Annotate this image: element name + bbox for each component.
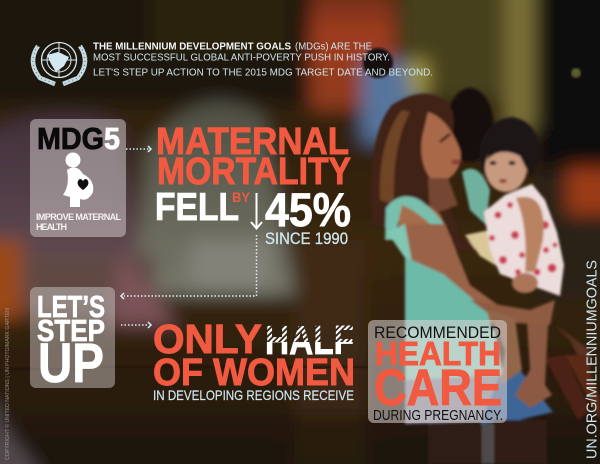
panel: recommended health care: CARE	[374, 359, 502, 416]
photo credit: COPYRIGHT © UNITED NATIONS | UN PHOTO/MARK GARTEN	[4, 308, 11, 460]
arrow: MDG5 to headline	[126, 146, 151, 152]
icon: down arrow	[251, 193, 262, 228]
caption: improve maternal health	[36, 212, 122, 232]
headline: only half of women	[154, 324, 354, 400]
headline: only half of women: IN DEVELOPING REGIONS RECEIVE	[153, 387, 354, 403]
MDG5 label: MDG5	[37, 121, 120, 156]
header	[33, 40, 433, 84]
headline: maternal mortality fell by 45%: 45%	[265, 183, 351, 236]
panel: recommended health care	[368, 320, 507, 424]
caption: improve maternal health: HEALTH	[36, 222, 67, 232]
half with hatched top: HALF	[265, 317, 354, 363]
panel: MDG5	[30, 119, 126, 237]
headline: only half of women: OF WOMEN	[153, 352, 355, 394]
icon: pregnant woman with heart	[63, 152, 93, 207]
panel: recommended health care: HEALTH	[375, 335, 501, 372]
arrow: step up to only half	[121, 322, 151, 328]
panel: let's step up: LET’S	[37, 289, 105, 324]
panel: let's step up: STEP	[37, 313, 105, 348]
panel: recommended health care: RECOMMENDED	[374, 323, 501, 342]
half with hatched top: HALF	[265, 317, 354, 363]
panel: let's step up: UP	[38, 331, 104, 394]
headline: maternal mortality fell by 45%: SINCE 1990	[265, 230, 348, 248]
headline: maternal mortality fell by 45%: MATERNAL	[156, 121, 349, 163]
panel: recommended health care: DURING PREGNANCY.	[373, 408, 503, 424]
url: un.org/millenniumgoals: UN.ORG/MILLENNIUMGOALS	[584, 260, 600, 459]
header text block: MOST SUCCESSFUL GLOBAL ANTI-POVERTY PUSH IN HISTORY.	[93, 52, 390, 64]
headline: maternal mortality fell by 45%	[155, 121, 351, 248]
headline: maternal mortality fell by 45%: FELL	[155, 186, 239, 229]
half with hatched top	[266, 326, 353, 355]
header text block	[93, 40, 433, 78]
caption: improve maternal health: IMPROVE MATERNAL	[36, 212, 122, 222]
panel: let's step up	[30, 287, 115, 394]
headline: maternal mortality fell by 45%: MORTALITY	[157, 151, 351, 193]
icon: UN emblem	[33, 42, 85, 84]
headline: maternal mortality fell by 45%: BY	[232, 189, 251, 205]
header text block: THE MILLENNIUM DEVELOPMENT GOALS	[93, 40, 291, 52]
headline: only half of women: ONLY	[153, 316, 262, 362]
arrow: dotted connector to Let's step up	[121, 235, 256, 299]
woman and baby	[371, 88, 600, 464]
header text block: (MDGs) ARE THE	[295, 40, 372, 52]
header text block: LET'S STEP UP ACTION TO THE 2015 MDG TARGET DATE AND BEYOND.	[93, 66, 433, 78]
